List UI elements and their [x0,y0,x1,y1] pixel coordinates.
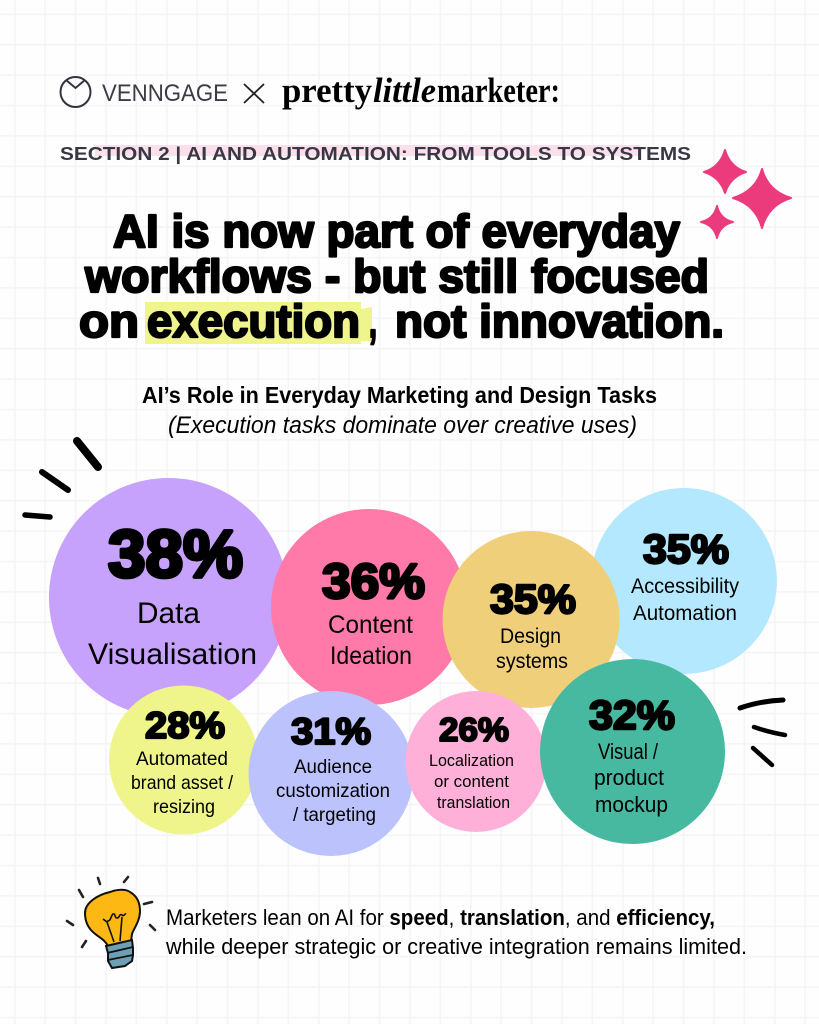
bubble: Design systems 35%: systems [496,649,568,673]
takeaway text [165,905,747,959]
icon: light bulb [67,877,155,968]
accent strokes left [25,441,98,517]
bubble: Automated brand asset / resizing 28%: resizing [153,796,215,818]
bubble: Automated brand asset / resizing 28% [109,686,258,834]
bubble: Audience customization / targeting 31%: 31% [291,711,371,752]
icon: Venngage logo [60,77,90,107]
bubble: Content Ideation 36%: 36% [322,555,425,609]
bubble: Design systems 35% [442,531,620,708]
Pretty Little Marketer wordmark: little [373,71,436,110]
bubble: Visual / product mockup 32%: mockup [595,792,668,817]
title: workflows - but still focused [84,250,709,302]
bubble: Data Visualisation 38%: Visualisation [88,638,257,671]
bubble: Content Ideation 36%: Ideation [330,642,412,670]
title: on [79,295,139,347]
highlight: execution [145,302,372,344]
title [79,205,724,347]
bubble: Automated brand asset / resizing 28%: Automated [136,748,228,770]
bubble: Audience customization / targeting 31%: / targeting [293,804,376,826]
bubble: Accessibility Automation 35% [591,488,777,674]
bulb screw base [106,940,133,968]
bubble: Automated brand asset / resizing 28%: brand asset / [131,772,234,794]
Pretty Little Marketer wordmark: pretty [282,71,372,110]
section label with highlight: SECTION 2 | AI AND AUTOMATION: FROM TOOLS TO SYSTEMS [60,143,691,164]
Venngage wordmark: VENNGAGE [102,80,228,107]
icon: times symbol [244,84,264,103]
takeaway text: Marketers lean on AI for speed, translation, and efficiency, [166,905,715,930]
bubble: Visual / product mockup 32%: 32% [589,692,675,738]
bubble: Visual / product mockup 32%: product [594,765,664,790]
bubble: Design systems 35%: Design [500,624,561,648]
chart subheading: (Execution tasks dominate over creative uses) [168,412,637,439]
bubble: Audience customization / targeting 31%: Audience [294,756,372,778]
title: execution [147,295,360,347]
bubble: Accessibility Automation 35%: Accessibility [631,574,739,598]
Pretty Little Marketer wordmark: marketer: [437,71,560,110]
bulb rays [67,877,155,947]
title: not innovation. [395,295,724,347]
bubble: Localization or content translation 26% [406,691,546,832]
bubble: Accessibility Automation 35%: Automation [633,601,737,625]
bubble: Accessibility Automation 35%: 35% [643,526,729,572]
bubble: Localization or content translation 26%: Localization [429,751,514,770]
bulb filament [103,914,126,942]
bubble: Audience customization / targeting 31% [248,691,414,856]
bubble: Localization or content translation 26%: translation [437,793,510,812]
bubble: Design systems 35%: 35% [490,576,576,622]
bubble: Visual / product mockup 32% [540,659,725,844]
bubble: Data Visualisation 38%: 38% [108,517,243,592]
bubble: Localization or content translation 26%: or content [434,772,509,791]
bubble: Content Ideation 36% [271,509,467,705]
title: AI is now part of everyday [113,205,680,257]
bulb glass [85,890,140,946]
bubble: Audience customization / targeting 31%: customization [276,780,390,802]
icon: pink sparkles [701,150,791,238]
bubble: Data Visualisation 38% [49,478,288,717]
accent strokes right [740,700,785,765]
bubble: Localization or content translation 26%: 26% [439,711,509,748]
title: , [369,295,377,347]
bubble: Content Ideation 36%: Content [328,611,413,639]
Pretty Little Marketer wordmark [282,71,560,110]
bubble: Data Visualisation 38%: Data [137,597,200,630]
logo row: Venngage x Pretty Little Marketer [60,71,560,110]
bubble: Visual / product mockup 32%: Visual / [598,739,659,764]
takeaway text: while deeper strategic or creative integration remains limited. [165,934,747,959]
chart heading: AI’s Role in Everyday Marketing and Design Tasks [142,382,657,408]
bubble: Automated brand asset / resizing 28%: 28% [145,705,225,746]
